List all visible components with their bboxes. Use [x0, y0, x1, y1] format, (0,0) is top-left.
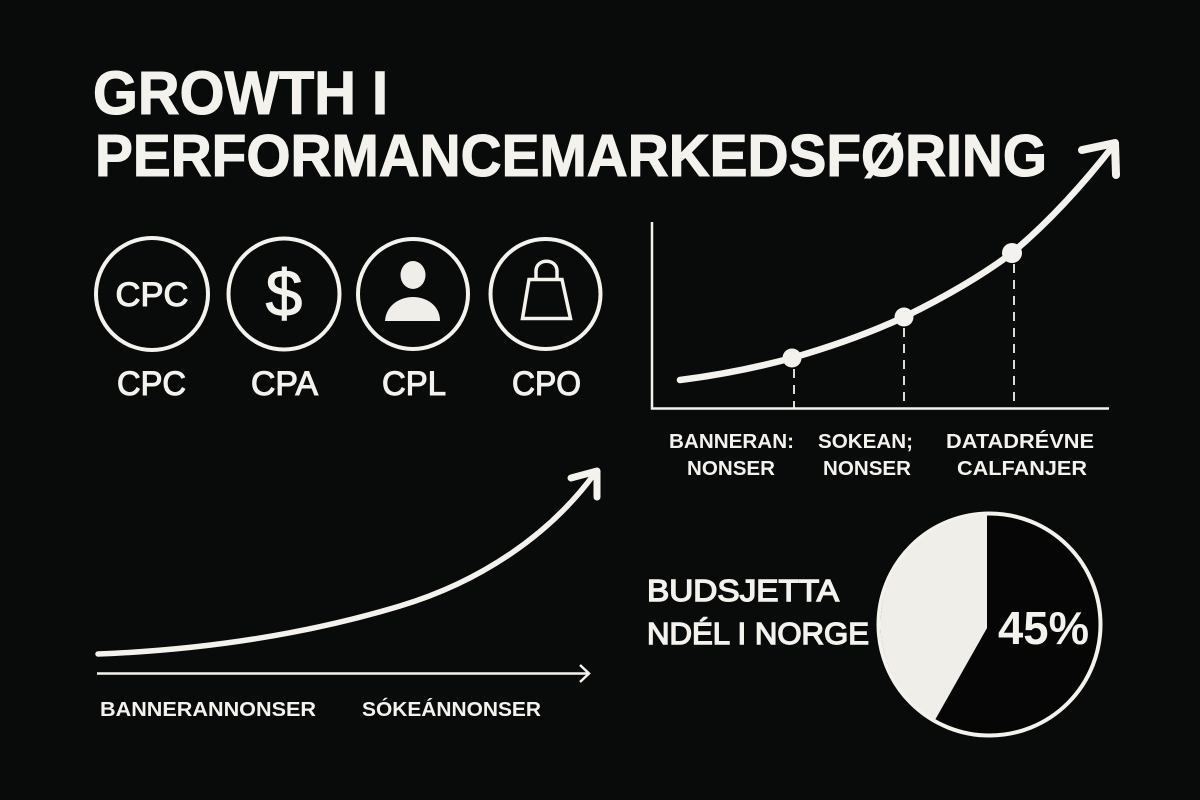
timeline arrow [97, 665, 589, 682]
dashed guide lines [794, 264, 1014, 408]
axis label: banner: BANNERAN: [669, 431, 794, 453]
axis label: data driven: DATADRÉVNE [946, 430, 1094, 453]
label: CPA: CPA [251, 365, 318, 403]
icon: shopping bag [490, 239, 600, 349]
label: CPL: CPL [382, 365, 446, 403]
icon: dollar: $ [266, 256, 302, 330]
axis label: data driven [946, 430, 1094, 480]
icon: person [358, 239, 468, 349]
axis label: data driven: CALFANJER [957, 458, 1088, 480]
axis label: banner [669, 431, 794, 480]
title: GROWTH I [93, 59, 388, 127]
pie value: 45% [998, 602, 1089, 654]
budget label: BUDSJETTA [647, 573, 839, 608]
icon: dollar [228, 238, 340, 350]
panel: budget share [647, 514, 1100, 736]
title: PERFORMANCEMARKEDSFØRING [95, 123, 1047, 189]
panel: metric icons [96, 238, 600, 403]
icon: CPC: CPC [116, 276, 188, 314]
label: CPC: CPC [117, 365, 186, 403]
axis label: search: SOKEAN; [818, 431, 913, 453]
budget label [647, 573, 869, 651]
growth curve arrow [680, 143, 1116, 380]
axis label: search: NONSER [823, 458, 912, 480]
label: CPO: CPO [512, 365, 581, 403]
rising arrow [98, 471, 597, 654]
axis label: search [818, 431, 913, 480]
budget label: NDÉL I NORGE [647, 616, 869, 651]
chart axes [652, 222, 1109, 408]
axis label: banner: NONSER [687, 458, 776, 480]
panel: growth line chart [652, 143, 1116, 480]
data points [782, 243, 1022, 368]
title [93, 59, 1047, 189]
label: search ads: SÓKEÁNNONSER [362, 697, 542, 721]
pie chart [878, 514, 1100, 736]
icon: CPC [96, 238, 208, 350]
label: banner ads: BANNERANNONSER [100, 699, 317, 721]
panel: lower growth chart [97, 471, 597, 721]
